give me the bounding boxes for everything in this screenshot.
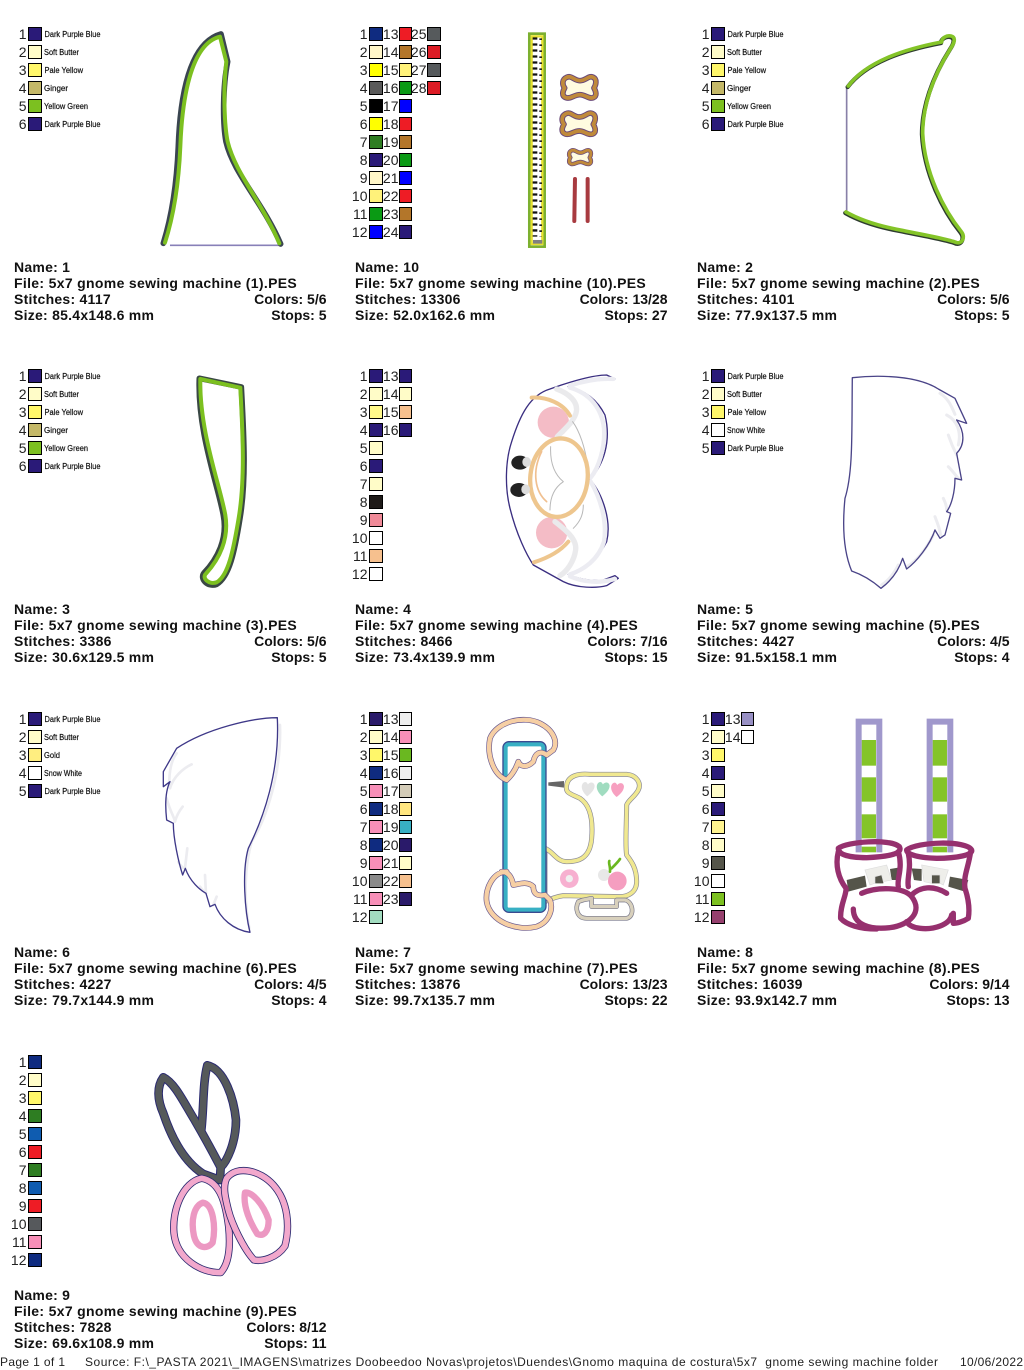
panel: design 4: [352, 368, 668, 665]
thread legend: [19, 368, 101, 474]
thread legend: 6: [360, 458, 368, 474]
thread legend: 5: [19, 440, 27, 456]
design details: Size: 93.9x142.7 mm: [697, 992, 837, 1008]
thread legend: 2: [360, 386, 368, 402]
thread legend: 8: [360, 152, 368, 168]
thread legend: Snow White: [44, 769, 82, 778]
thread legend: 22: [383, 873, 399, 889]
thread legend: 2: [702, 729, 710, 745]
design details: File: 5x7 gnome sewing machine (6).PES: [14, 960, 297, 976]
thread legend: [352, 711, 412, 925]
thread legend: 9: [360, 512, 368, 528]
thread legend: 6: [360, 116, 368, 132]
thread legend: 6: [702, 801, 710, 817]
embroidery: gnome hat band: [199, 378, 244, 585]
thread legend: 13: [383, 368, 399, 384]
thread legend: Dark Purple Blue: [44, 787, 101, 796]
design details: [14, 259, 327, 323]
thread legend: Yellow Green: [44, 102, 88, 111]
thread legend: 4: [360, 765, 368, 781]
thread legend: 7: [19, 1162, 27, 1178]
thread legend: [19, 26, 101, 132]
embroidery: beard right: [163, 718, 280, 932]
embroidery: gnome hat right: [845, 36, 963, 244]
design details: Stops: 5: [271, 307, 327, 323]
thread legend: 3: [360, 404, 368, 420]
thread legend: 11: [353, 891, 368, 907]
thread legend: Ginger: [44, 84, 68, 93]
thread legend: 3: [19, 62, 27, 78]
design details: File: 5x7 gnome sewing machine (4).PES: [355, 617, 638, 633]
thread legend: 15: [383, 62, 399, 78]
thread legend: 1: [360, 711, 368, 727]
design details: Stitches: 8466: [355, 633, 453, 649]
thread legend: 25: [411, 26, 427, 42]
design details: Name: 1: [14, 259, 70, 275]
footer: 10/06/2022: [960, 1355, 1023, 1369]
design details: [697, 944, 1010, 1008]
thread legend: 5: [360, 440, 368, 456]
thread legend: 2: [360, 44, 368, 60]
thread legend: 4: [19, 80, 27, 96]
design details: [14, 1287, 327, 1351]
design details: Colors: 13/23: [580, 976, 668, 992]
design details: [355, 944, 668, 1008]
panel: design 2: [697, 26, 1010, 323]
thread legend: 1: [19, 711, 27, 727]
thread legend: 8: [702, 837, 710, 853]
thread legend: [702, 368, 784, 456]
design details: Colors: 4/5: [937, 633, 1010, 649]
thread legend: Dark Purple Blue: [44, 715, 101, 724]
thread legend: Dark Purple Blue: [728, 120, 784, 129]
design details: Colors: 5/6: [254, 291, 327, 307]
design details: [355, 601, 668, 665]
thread legend: 5: [702, 783, 710, 799]
thread legend: 1: [360, 26, 368, 42]
thread legend: 9: [360, 855, 368, 871]
thread legend: 3: [19, 1090, 27, 1106]
thread legend: 18: [383, 801, 399, 817]
design details: Stops: 13: [946, 992, 1010, 1008]
design details: File: 5x7 gnome sewing machine (5).PES: [697, 617, 980, 633]
design details: Stops: 4: [954, 649, 1010, 665]
design details: Stops: 22: [604, 992, 668, 1008]
design details: Colors: 5/6: [254, 633, 327, 649]
thread legend: 19: [383, 819, 399, 835]
design details: [697, 259, 1010, 323]
design details: Name: 5: [697, 601, 753, 617]
thread legend: Dark Purple Blue: [44, 372, 101, 381]
thread legend: 27: [411, 62, 427, 78]
panel: design 1: [14, 26, 327, 323]
thread legend: 2: [19, 1072, 27, 1088]
thread legend: 14: [725, 729, 741, 745]
design details: Name: 7: [355, 944, 411, 960]
thread legend: 4: [360, 80, 368, 96]
thread legend: 4: [19, 422, 27, 438]
design details: Colors: 5/6: [937, 291, 1010, 307]
thread legend: 16: [383, 80, 399, 96]
thread legend: 3: [360, 747, 368, 763]
thread legend: Pale Yellow: [728, 408, 766, 417]
thread legend: 10: [352, 530, 368, 546]
thread legend: 22: [383, 188, 399, 204]
thread legend: [694, 711, 754, 925]
thread legend: 2: [702, 44, 710, 60]
design details: File: 5x7 gnome sewing machine (8).PES: [697, 960, 980, 976]
design details: Stitches: 7828: [14, 1319, 112, 1335]
thread legend: 1: [360, 368, 368, 384]
design details: Stitches: 16039: [697, 976, 803, 992]
design details: Size: 73.4x139.9 mm: [355, 649, 495, 665]
thread legend: [11, 1054, 42, 1268]
thread legend: 17: [383, 98, 399, 114]
embroidery: gnome hat left: [163, 34, 282, 245]
design details: Colors: 8/12: [246, 1319, 327, 1335]
design details: Name: 4: [355, 601, 411, 617]
design details: Stitches: 13306: [355, 291, 461, 307]
thread legend: 19: [383, 134, 399, 150]
design details: Name: 3: [14, 601, 70, 617]
design details: Size: 85.4x148.6 mm: [14, 307, 154, 323]
thread legend: 2: [19, 386, 27, 402]
thread legend: 23: [383, 891, 399, 907]
embroidery: gnome face with glasses: [506, 375, 618, 587]
thread legend: 6: [19, 116, 27, 132]
design details: Stops: 11: [264, 1335, 327, 1351]
design details: Colors: 4/5: [254, 976, 327, 992]
thread legend: 2: [19, 729, 27, 745]
thread legend: 17: [383, 783, 399, 799]
embroidery: beard left: [844, 376, 967, 588]
design details: Colors: 7/16: [587, 633, 668, 649]
thread legend: 1: [19, 1054, 27, 1070]
thread legend: 2: [19, 44, 27, 60]
thread legend: 10: [352, 873, 368, 889]
thread legend: 5: [360, 98, 368, 114]
panel: design 5: [697, 368, 1010, 665]
thread legend: Dark Purple Blue: [728, 372, 784, 381]
thread legend: Dark Purple Blue: [728, 30, 784, 39]
design details: [14, 601, 327, 665]
design details: Colors: 13/28: [580, 291, 668, 307]
thread legend: 13: [725, 711, 741, 727]
design details: Name: 6: [14, 944, 70, 960]
thread legend: 7: [360, 134, 368, 150]
thread legend: 12: [352, 224, 368, 240]
thread legend: 2: [360, 729, 368, 745]
thread legend: Soft Butter: [727, 48, 762, 57]
thread legend: 10: [11, 1216, 27, 1232]
thread legend: 11: [353, 206, 368, 222]
thread legend: 4: [702, 422, 710, 438]
thread legend: 10: [352, 188, 368, 204]
thread legend: 5: [19, 783, 27, 799]
thread legend: 3: [19, 404, 27, 420]
thread legend: 10: [694, 873, 710, 889]
embroidery: scissors: [159, 1065, 288, 1273]
design details: Size: 52.0x162.6 mm: [355, 307, 495, 323]
thread legend: 12: [352, 566, 368, 582]
thread legend: 14: [383, 729, 399, 745]
thread legend: 4: [19, 765, 27, 781]
embroidery: ruler and bobbins: [529, 34, 596, 247]
footer: Source: F:\_PASTA 2021\_IMAGENS\matrizes Doobeedoo Novas\projetos\Duendes\Gnomo maquina de costura\5x7 gnome sewing machine folder: [85, 1355, 938, 1369]
thread legend: 6: [19, 458, 27, 474]
thread legend: Dark Purple Blue: [44, 30, 101, 39]
design details: Stops: 15: [604, 649, 668, 665]
design details: File: 5x7 gnome sewing machine (9).PES: [14, 1303, 297, 1319]
thread legend: Soft Butter: [44, 48, 79, 57]
thread legend: 18: [383, 116, 399, 132]
thread legend: 5: [702, 98, 710, 114]
thread legend: Ginger: [727, 84, 751, 93]
thread legend: Soft Butter: [727, 390, 762, 399]
thread legend: 21: [383, 855, 399, 871]
thread legend: 1: [19, 368, 27, 384]
thread legend: Yellow Green: [727, 102, 771, 111]
design details: Size: 79.7x144.9 mm: [14, 992, 154, 1008]
design details: Name: 2: [697, 259, 753, 275]
thread legend: 4: [360, 422, 368, 438]
design details: File: 5x7 gnome sewing machine (7).PES: [355, 960, 638, 976]
thread legend: 8: [360, 494, 368, 510]
thread legend: 8: [19, 1180, 27, 1196]
thread legend: Yellow Green: [44, 444, 88, 453]
thread legend: 23: [383, 206, 399, 222]
thread legend: 16: [383, 422, 399, 438]
thread legend: 7: [360, 819, 368, 835]
thread legend: 12: [694, 909, 710, 925]
design details: File: 5x7 gnome sewing machine (3).PES: [14, 617, 297, 633]
thread legend: Soft Butter: [44, 390, 79, 399]
thread legend: 9: [19, 1198, 27, 1214]
thread legend: 21: [383, 170, 399, 186]
thread legend: 3: [702, 747, 710, 763]
design details: Stops: 5: [954, 307, 1010, 323]
embroidery: sewing machine: [486, 720, 639, 928]
thread legend: 13: [383, 711, 399, 727]
thread legend: [352, 368, 412, 582]
thread legend: 24: [383, 224, 399, 240]
design details: File: 5x7 gnome sewing machine (2).PES: [697, 275, 980, 291]
thread legend: Snow White: [727, 426, 765, 435]
thread legend: [702, 26, 784, 132]
thread legend: Gold: [44, 751, 60, 760]
footer: Page 1 of 1: [0, 1355, 65, 1369]
design details: [355, 259, 668, 323]
thread legend: 1: [702, 26, 710, 42]
design details: File: 5x7 gnome sewing machine (1).PES: [14, 275, 297, 291]
thread legend: 4: [702, 765, 710, 781]
thread legend: Pale Yellow: [728, 66, 766, 75]
thread legend: 11: [695, 891, 710, 907]
panel: design 7: [352, 711, 668, 1008]
thread legend: 12: [352, 909, 368, 925]
design details: Colors: 9/14: [929, 976, 1010, 992]
thread legend: Pale Yellow: [44, 408, 83, 417]
design details: Stops: 27: [604, 307, 668, 323]
panel: design 8: [694, 711, 1010, 1008]
design details: Name: 8: [697, 944, 753, 960]
thread legend: 7: [702, 819, 710, 835]
thread legend: [352, 26, 440, 240]
thread legend: 5: [702, 440, 710, 456]
thread legend: Soft Butter: [44, 733, 79, 742]
thread legend: 4: [702, 80, 710, 96]
design details: [697, 601, 1010, 665]
thread legend: Dark Purple Blue: [44, 120, 101, 129]
thread legend: 5: [19, 1126, 27, 1142]
thread legend: 14: [383, 386, 399, 402]
thread legend: 3: [19, 747, 27, 763]
panel: design 9: [11, 1054, 327, 1351]
design details: Stitches: 4227: [14, 976, 112, 992]
design details: Stitches: 4101: [697, 291, 795, 307]
design details: Stops: 5: [271, 649, 327, 665]
thread legend: 6: [702, 116, 710, 132]
thread legend: 26: [411, 44, 427, 60]
thread legend: 16: [383, 765, 399, 781]
thread legend: 1: [702, 368, 710, 384]
thread legend: 1: [19, 26, 27, 42]
thread legend: 5: [360, 783, 368, 799]
panel: design 10: [352, 26, 668, 323]
thread legend: 15: [383, 747, 399, 763]
thread legend: 6: [360, 801, 368, 817]
thread legend: 20: [383, 152, 399, 168]
thread legend: Dark Purple Blue: [44, 462, 101, 471]
design details: Name: 10: [355, 259, 419, 275]
design details: Stitches: 13876: [355, 976, 461, 992]
design details: Size: 77.9x137.5 mm: [697, 307, 837, 323]
thread legend: 11: [353, 548, 368, 564]
design details: Name: 9: [14, 1287, 70, 1303]
design details: [14, 944, 327, 1008]
thread legend: [19, 711, 101, 799]
thread legend: Dark Purple Blue: [728, 444, 784, 453]
thread legend: 2: [702, 386, 710, 402]
design details: Size: 30.6x129.5 mm: [14, 649, 154, 665]
thread legend: 12: [11, 1252, 27, 1268]
thread legend: 9: [360, 170, 368, 186]
thread legend: 6: [19, 1144, 27, 1160]
embroidery: striped socks and boots: [837, 722, 972, 929]
panel: design 6: [14, 711, 327, 1008]
design details: Stitches: 4427: [697, 633, 795, 649]
design details: Stops: 4: [271, 992, 327, 1008]
design details: Size: 99.7x135.7 mm: [355, 992, 495, 1008]
thread legend: 4: [19, 1108, 27, 1124]
panel: design 3: [14, 368, 327, 665]
thread legend: 1: [702, 711, 710, 727]
design details: Stitches: 4117: [14, 291, 111, 307]
thread legend: 14: [383, 44, 399, 60]
thread legend: 15: [383, 404, 399, 420]
thread legend: Ginger: [44, 426, 68, 435]
design details: Stitches: 3386: [14, 633, 112, 649]
thread legend: Pale Yellow: [44, 66, 83, 75]
design details: File: 5x7 gnome sewing machine (10).PES: [355, 275, 646, 291]
thread legend: 9: [702, 855, 710, 871]
design details: Size: 91.5x158.1 mm: [697, 649, 837, 665]
design details: Size: 69.6x108.9 mm: [14, 1335, 154, 1351]
thread legend: 3: [702, 404, 710, 420]
thread legend: 28: [411, 80, 427, 96]
thread legend: 13: [383, 26, 399, 42]
thread legend: 3: [702, 62, 710, 78]
thread legend: 7: [360, 476, 368, 492]
thread legend: 20: [383, 837, 399, 853]
thread legend: 8: [360, 837, 368, 853]
thread legend: 5: [19, 98, 27, 114]
thread legend: 3: [360, 62, 368, 78]
thread legend: 11: [12, 1234, 27, 1250]
